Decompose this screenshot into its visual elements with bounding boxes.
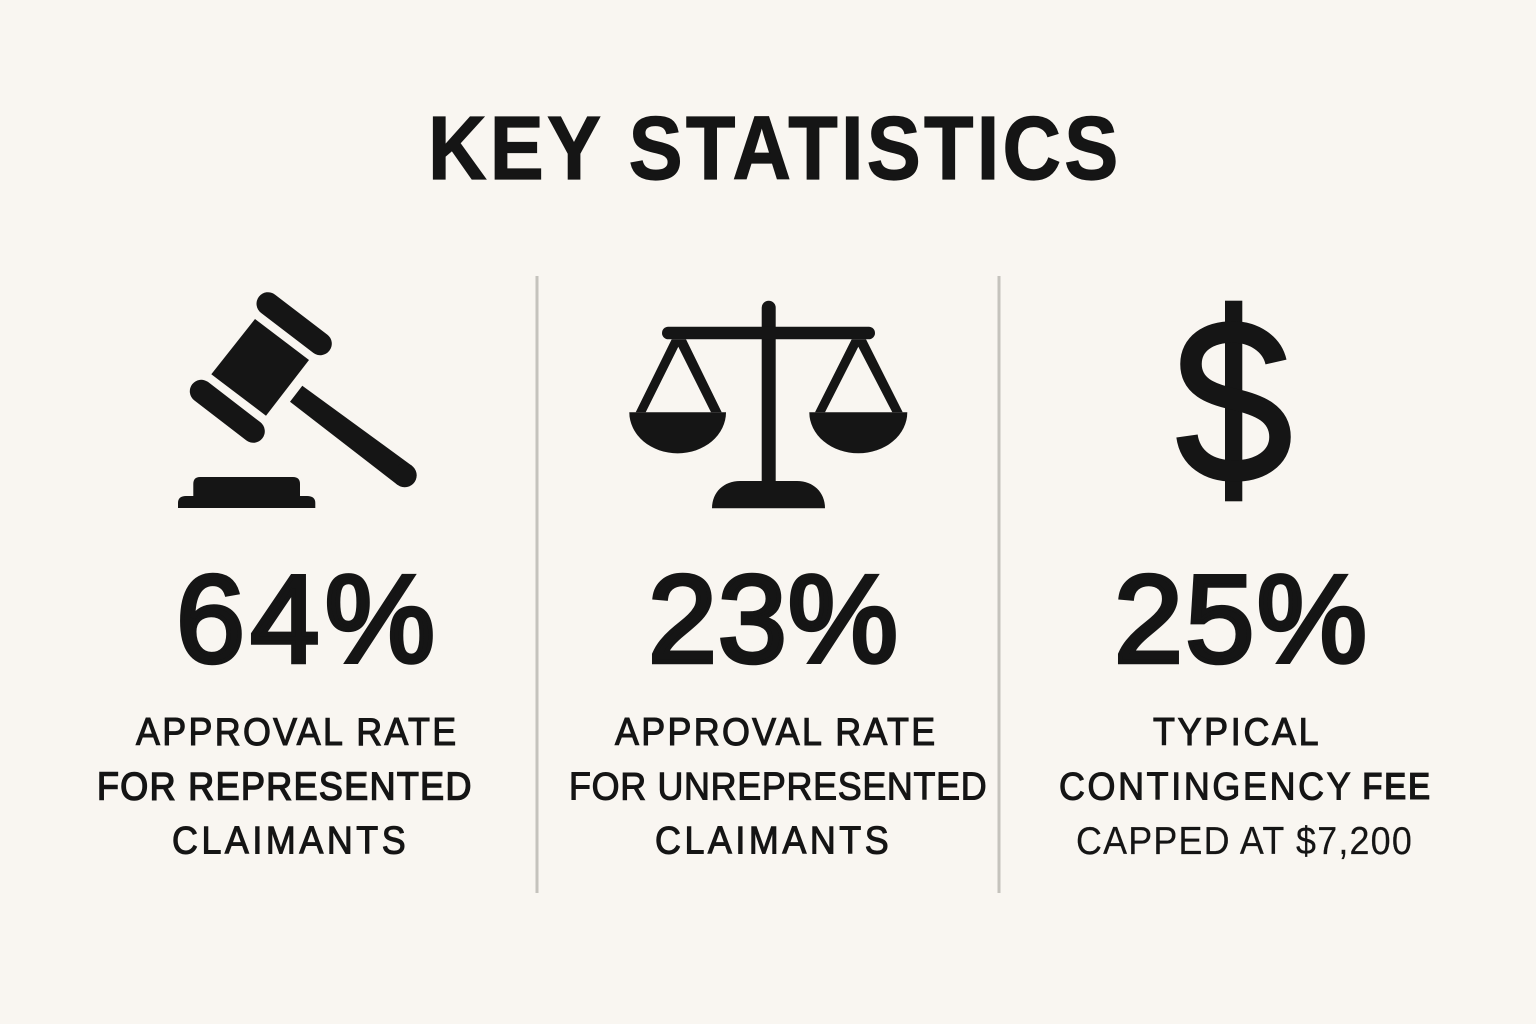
label: approval rate for unrepresented claimants: CLAIMANTS bbox=[655, 818, 889, 862]
label: typical contingency fee capped at $7,200: CAPPED AT $7,200 bbox=[1076, 819, 1412, 862]
title: KEY STATISTICS bbox=[428, 98, 1118, 199]
icon: scales of justice bbox=[629, 301, 907, 508]
icon: gavel bbox=[178, 304, 417, 508]
label: typical contingency fee capped at $7,200: CONTINGENCY bbox=[1059, 764, 1351, 808]
label: approval rate for represented claimants bbox=[97, 710, 471, 862]
stat: 25%: 25% bbox=[1114, 551, 1367, 689]
label: approval rate for unrepresented claimants: APPROVAL RATE bbox=[615, 710, 935, 753]
label: typical contingency fee capped at $7,200: TYPICAL bbox=[1153, 710, 1319, 753]
icon: dollar sign bbox=[1187, 301, 1280, 501]
label: approval rate for unrepresented claimants: FOR UNREPRESENTED bbox=[569, 764, 987, 808]
label: approval rate for represented claimants: APPROVAL RATE bbox=[136, 710, 456, 753]
stat: 23%: 23% bbox=[648, 551, 898, 689]
label: typical contingency fee capped at $7,200 bbox=[1059, 710, 1431, 862]
label: approval rate for represented claimants: FOR REPRESENTED bbox=[97, 764, 471, 808]
panel: represented claimants bbox=[97, 304, 471, 862]
panel: unrepresented claimants bbox=[569, 301, 987, 862]
stat: 64%: 64% bbox=[176, 551, 435, 689]
label: approval rate for unrepresented claimants bbox=[569, 710, 987, 862]
label: typical contingency fee capped at $7,200: FEE bbox=[1362, 764, 1431, 808]
label: approval rate for represented claimants: CLAIMANTS bbox=[172, 818, 406, 862]
panel: contingency fee bbox=[1059, 301, 1431, 862]
